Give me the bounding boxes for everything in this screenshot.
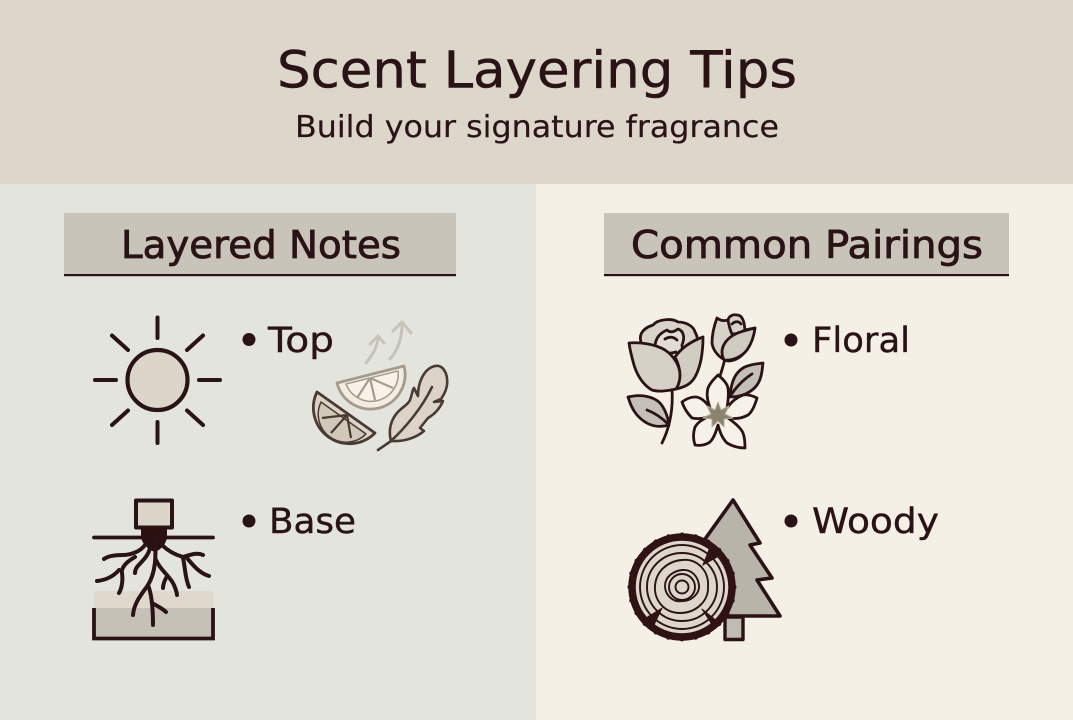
heading: layered notes: Layered Notes [121, 223, 401, 267]
label: top: Top [267, 321, 334, 361]
panel: common pairings background [536, 184, 1073, 720]
icon: feather [378, 366, 447, 450]
subtitle: Build your signature fragrance [295, 110, 779, 145]
large rose back [640, 320, 698, 372]
heading: common pairings [604, 213, 1009, 276]
icon: sun [95, 318, 220, 443]
icon: light citrus slice [337, 366, 405, 409]
title: Scent Layering Tips [277, 42, 797, 100]
tree [725, 617, 743, 640]
blossom [682, 375, 757, 448]
icon: tree and log [630, 500, 780, 640]
label: woody: Woody [812, 502, 939, 542]
label: top [242, 321, 334, 361]
icon: rising arrows [366, 322, 411, 363]
heading: layered notes [64, 213, 456, 276]
lower leaf [628, 396, 669, 426]
log [632, 537, 732, 637]
large rose right petal [675, 337, 703, 389]
label: floral: Floral [812, 321, 910, 361]
bud [712, 315, 755, 361]
heading: common pairings: Common Pairings [631, 223, 983, 267]
stems [662, 359, 725, 443]
icon: rose and blossom [628, 315, 763, 448]
icon: roots in soil [94, 500, 213, 638]
panel: header band [0, 0, 1073, 184]
icon: dark citrus slice [313, 392, 375, 444]
large rose cup [629, 343, 680, 391]
label: base: Base [269, 502, 356, 542]
large rose centre [655, 329, 684, 372]
upper right leaf [730, 363, 763, 397]
panel: layered notes background [0, 184, 536, 720]
